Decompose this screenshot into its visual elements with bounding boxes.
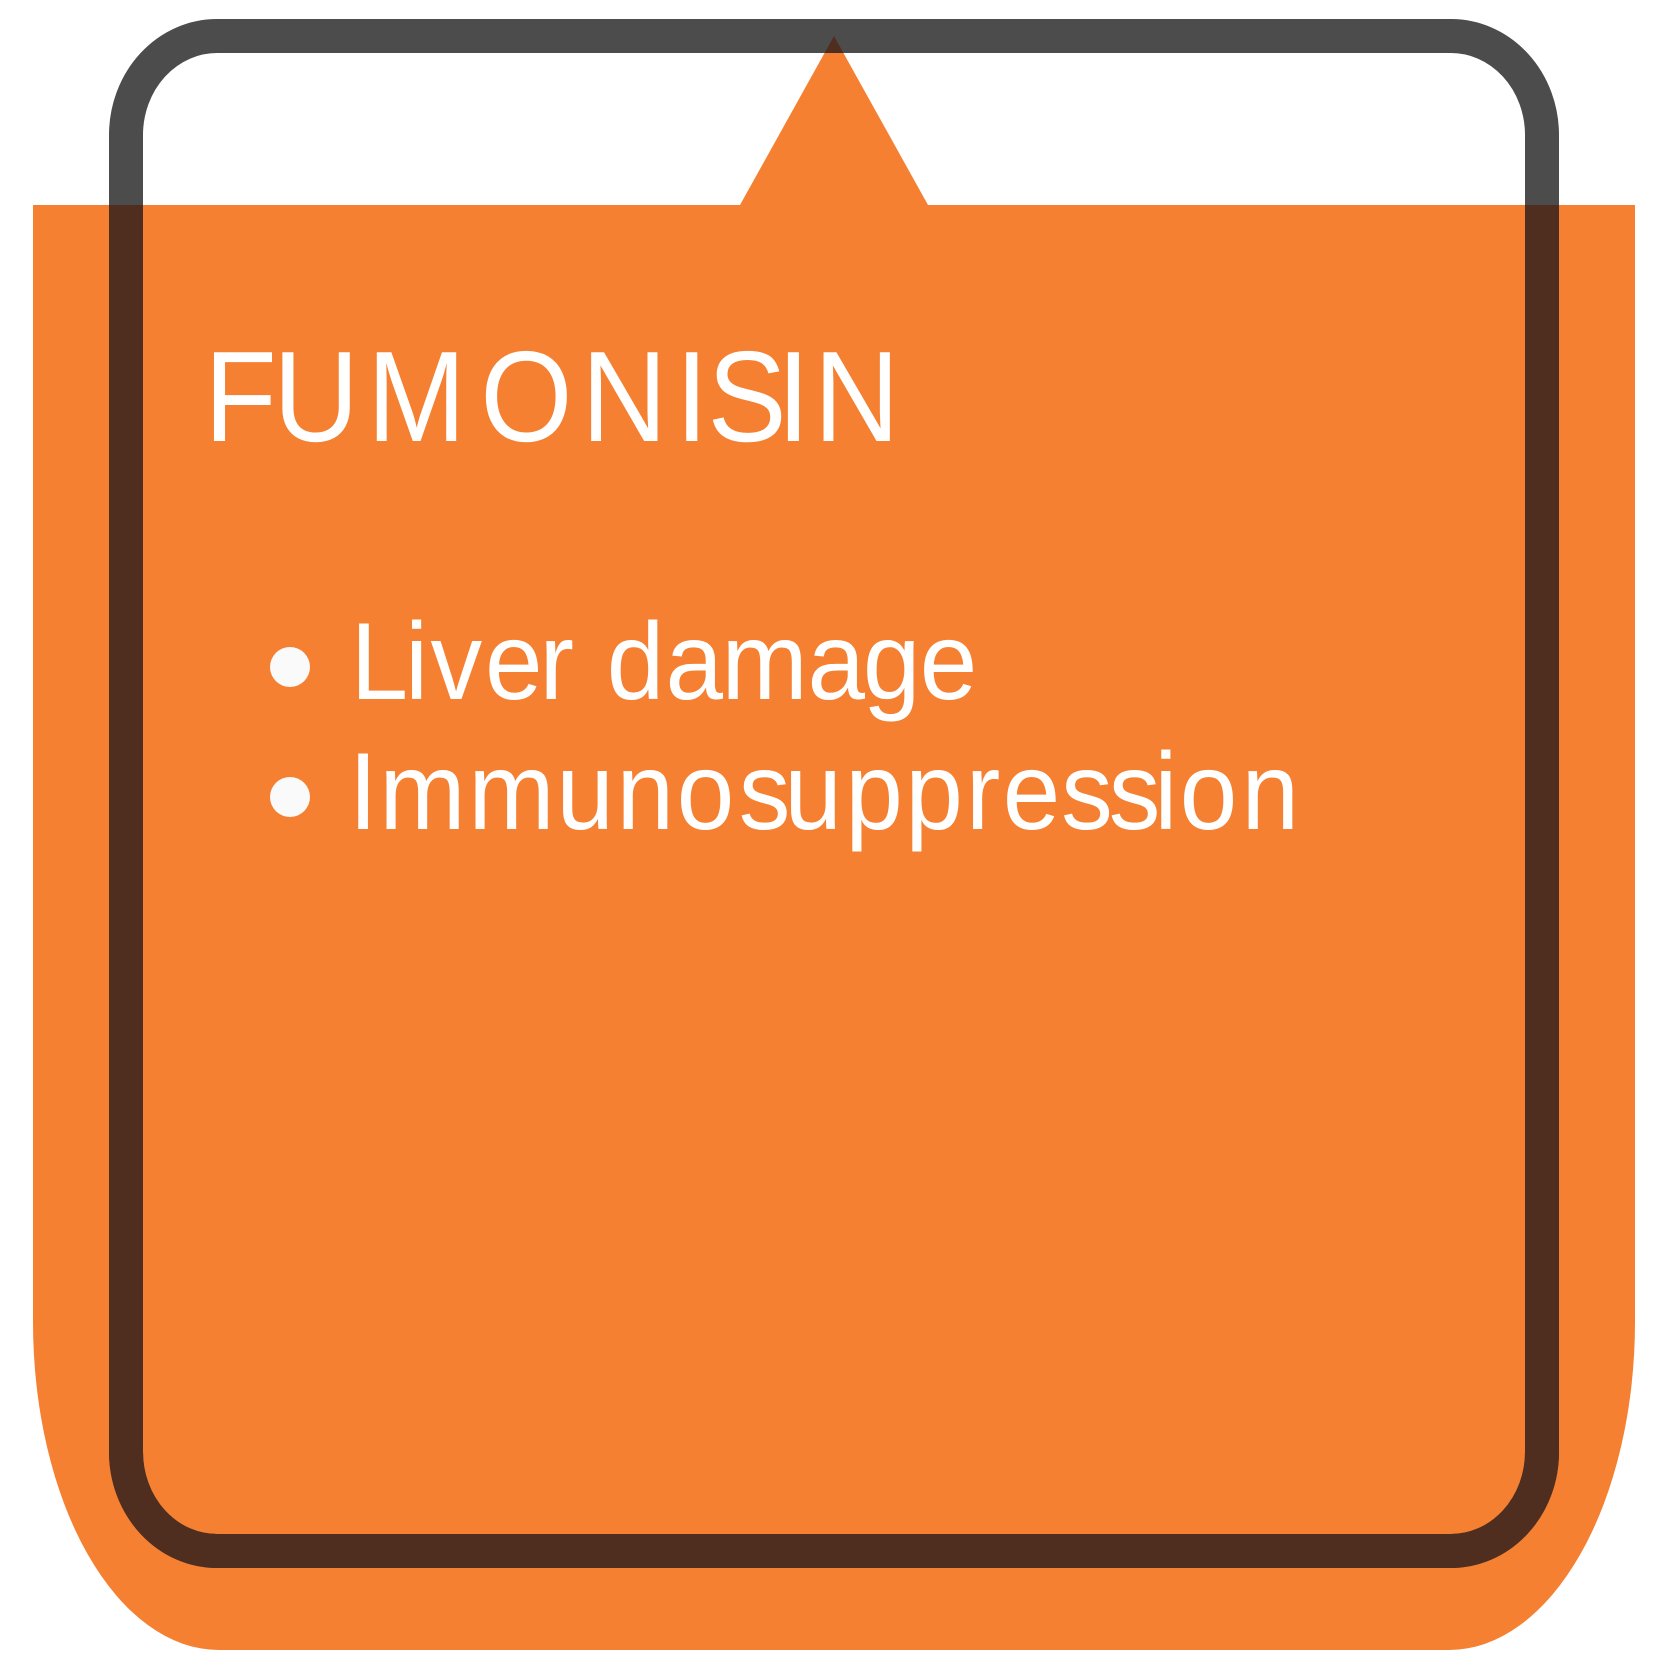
frame: dark rounded outline: [126, 36, 1542, 1551]
item text: Liver damage: [351, 599, 977, 723]
bullet: [270, 777, 310, 817]
list: health effects: [270, 599, 1299, 853]
bullet: [270, 647, 310, 687]
heading: toxin name: FUMONISIN: [204, 325, 900, 469]
item text: Immunosuppression: [349, 729, 1299, 853]
list item: liver damage: [270, 599, 977, 723]
list item: immunosuppression: [270, 729, 1299, 853]
